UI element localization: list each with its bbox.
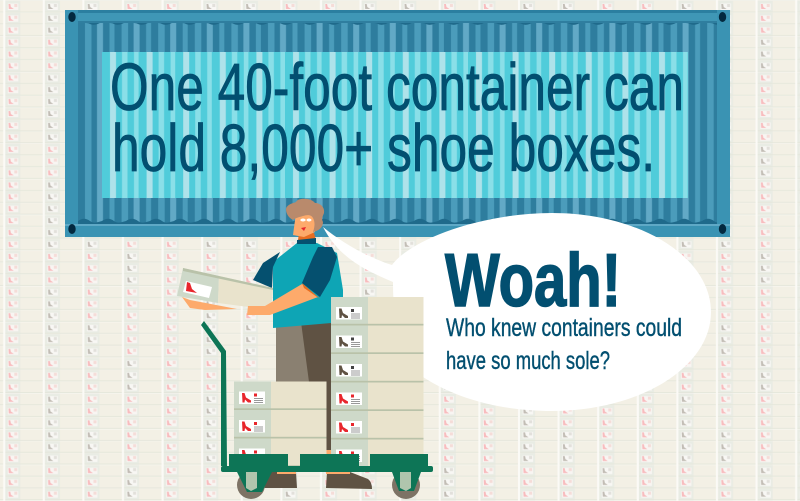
- top scalloped shadow: [78, 23, 717, 30]
- hair: [286, 199, 324, 232]
- right arm and hand: [247, 283, 320, 315]
- handle and base: [201, 321, 433, 472]
- shoes: [263, 471, 372, 489]
- stacks of shoe boxes: [234, 297, 424, 468]
- neck and collar: [297, 233, 316, 244]
- shoe box held: [177, 268, 273, 310]
- exclamation: Woah!: [445, 238, 621, 322]
- corner rivets: [68, 12, 726, 234]
- container body frame: [65, 10, 730, 237]
- corrugated outer ribs: [78, 23, 717, 224]
- top rail: [78, 10, 717, 23]
- bubble sentence: Who knew containers could: [446, 314, 682, 342]
- torso: [273, 243, 343, 328]
- speech bubble: [323, 213, 711, 411]
- legs: [276, 320, 332, 454]
- title: [110, 50, 684, 186]
- bubble text: [445, 238, 682, 375]
- hand cart: [201, 321, 433, 499]
- deck blocks: [229, 454, 428, 466]
- right sleeve: [302, 247, 337, 297]
- bubble sentence: [446, 314, 682, 375]
- worker with shoe box: [177, 199, 372, 489]
- bottom rail: [65, 224, 730, 237]
- bright corrugated centre panel: [102, 52, 688, 198]
- bubble sentence: have so much sole?: [446, 347, 610, 375]
- bottom scalloped shadow: [78, 218, 717, 224]
- wheels: [237, 471, 420, 499]
- head: [293, 213, 315, 237]
- shipping container: [65, 10, 730, 237]
- right stack: [331, 297, 424, 468]
- left sleeve: [253, 252, 280, 288]
- left hand under box: [182, 297, 237, 310]
- left stack: [234, 382, 326, 467]
- wheel forks: [237, 472, 421, 492]
